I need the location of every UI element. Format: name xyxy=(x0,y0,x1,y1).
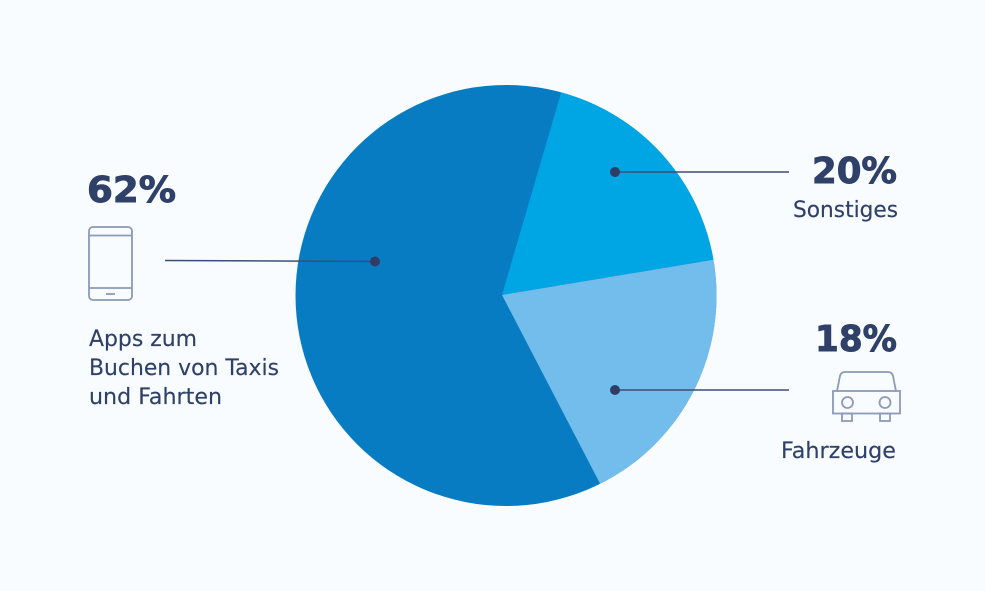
label: Apps zum Buchen von Taxis und Fahrten xyxy=(89,326,279,410)
value: 18%: 18% xyxy=(815,319,897,360)
slice: Apps 62% xyxy=(290,80,722,512)
icon: smartphone xyxy=(89,227,132,300)
label: Apps zum Buchen von Taxis und Fahrten: Buchen von Taxis xyxy=(89,355,279,381)
callout: Apps 62% xyxy=(87,170,380,410)
label: Sonstiges: Sonstiges xyxy=(793,197,898,223)
slice: Fahrzeuge 18% xyxy=(502,260,716,484)
slice: Sonstiges 20% xyxy=(502,92,714,295)
label: Apps zum Buchen von Taxis und Fahrten: und Fahrten xyxy=(89,384,222,410)
leader line: Sonstiges xyxy=(610,167,789,177)
value: 20%: 20% xyxy=(812,151,897,192)
callout: Fahrzeuge 18% xyxy=(610,319,900,464)
pie chart xyxy=(296,85,716,506)
leader line: Apps xyxy=(165,256,380,266)
label: Apps zum Buchen von Taxis und Fahrten: Apps zum xyxy=(89,326,197,352)
leader line: Fahrzeuge xyxy=(610,385,789,395)
callout: Sonstiges 20% xyxy=(610,151,898,223)
value: 62%: 62% xyxy=(87,170,176,211)
label: Fahrzeuge: Fahrzeuge xyxy=(781,438,896,464)
icon: car xyxy=(833,372,900,421)
